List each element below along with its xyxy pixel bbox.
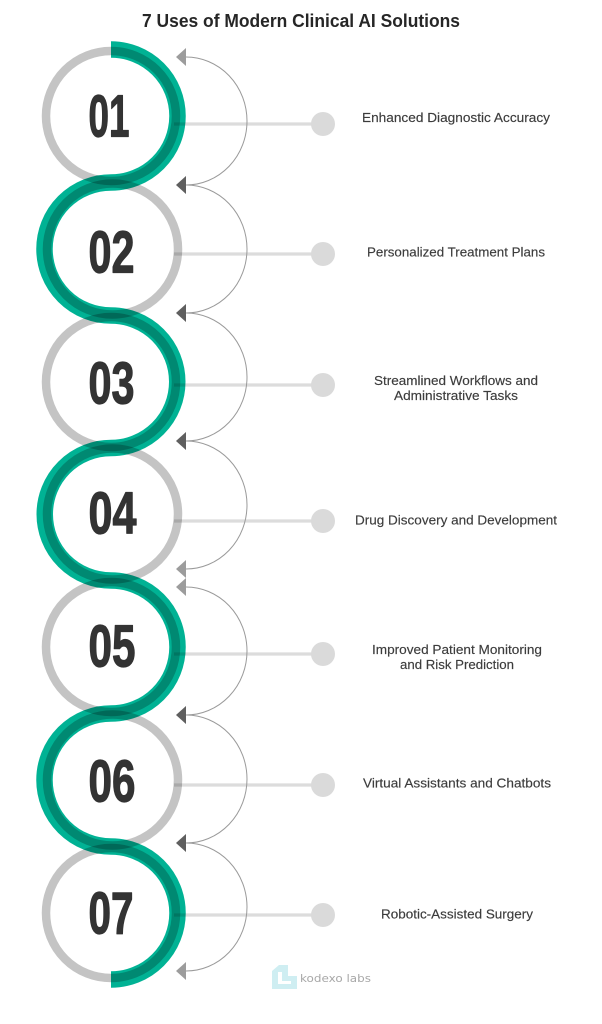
number 01: 01 bbox=[88, 84, 130, 150]
connector line 02 bbox=[174, 252, 323, 256]
curved arrow 03 bbox=[176, 304, 247, 450]
step 06: Virtual Assistants and Chatbots bbox=[45, 706, 552, 852]
step 05: Improved Patient Monitoring and Risk Prediction bbox=[46, 578, 542, 724]
title: 7 Uses of Modern Clinical AI Solutions bbox=[142, 11, 460, 31]
step 01: Enhanced Diagnostic Accuracy bbox=[46, 48, 551, 194]
dot 05 bbox=[311, 642, 335, 666]
curved arrow 07 bbox=[176, 834, 247, 980]
ring 07 bbox=[46, 848, 176, 978]
ring 05 bbox=[46, 582, 176, 712]
step 02: Personalized Treatment Plans bbox=[45, 176, 545, 322]
label 05: Improved Patient Monitoring bbox=[372, 642, 542, 657]
ring 04 bbox=[47, 448, 178, 580]
number 02: 02 bbox=[88, 220, 134, 286]
label 05: and Risk Prediction bbox=[400, 657, 514, 672]
label 06: Virtual Assistants and Chatbots bbox=[363, 776, 552, 790]
connector line 06 bbox=[174, 783, 323, 787]
teal arc 03 bbox=[111, 316, 177, 448]
connector line 05 bbox=[174, 652, 323, 656]
label 04: Drug Discovery and Development bbox=[355, 512, 557, 528]
ring 03 bbox=[46, 317, 176, 447]
icon: logo mark bbox=[272, 965, 297, 989]
label 03: Administrative Tasks bbox=[394, 388, 519, 403]
curved arrow 05 bbox=[176, 578, 247, 724]
logo wordmark: kodexo labs bbox=[300, 972, 371, 985]
teal arc 04 bbox=[45, 448, 111, 580]
label 01: Enhanced Diagnostic Accuracy bbox=[362, 110, 551, 125]
curved arrow 02 bbox=[176, 176, 247, 322]
teal arc 06 bbox=[45, 714, 111, 846]
curved arrow 04 bbox=[176, 432, 247, 578]
curved arrow 06 bbox=[176, 706, 247, 852]
step 04: Drug Discovery and Development bbox=[45, 432, 557, 580]
teal arc 07 bbox=[111, 846, 178, 980]
number 05: 05 bbox=[88, 614, 136, 680]
ring 01 bbox=[46, 51, 176, 181]
label 03 bbox=[374, 373, 538, 403]
connector line 03 bbox=[174, 383, 323, 387]
teal arc 05 bbox=[111, 580, 178, 714]
number 06: 06 bbox=[88, 748, 136, 814]
label 03: Streamlined Workflows and bbox=[374, 373, 538, 388]
dot 06 bbox=[311, 773, 335, 797]
ring 02 bbox=[47, 184, 178, 314]
dot 03 bbox=[311, 373, 335, 397]
connector line 01 bbox=[174, 122, 323, 126]
teal arc 02 bbox=[45, 182, 111, 316]
ring 06 bbox=[47, 714, 178, 846]
label 07: Robotic-Assisted Surgery bbox=[381, 906, 534, 922]
connector line 04 bbox=[174, 519, 323, 523]
number 04: 04 bbox=[88, 480, 137, 546]
step 03: Streamlined Workflows and Administrative Tasks bbox=[46, 304, 538, 450]
dot 02 bbox=[311, 242, 335, 266]
number 07: 07 bbox=[88, 880, 134, 946]
connector line 07 bbox=[174, 913, 323, 917]
dot 07 bbox=[311, 903, 335, 927]
label 05 bbox=[372, 642, 542, 672]
logo: kodexo labs bbox=[272, 965, 371, 989]
number 03: 03 bbox=[88, 350, 134, 416]
curved arrow 01 bbox=[176, 48, 247, 194]
dot 04 bbox=[311, 509, 335, 533]
label 02: Personalized Treatment Plans bbox=[367, 244, 545, 260]
teal arc 01 bbox=[111, 50, 178, 182]
dot 01 bbox=[311, 112, 335, 136]
step 07: Robotic-Assisted Surgery bbox=[46, 834, 534, 980]
